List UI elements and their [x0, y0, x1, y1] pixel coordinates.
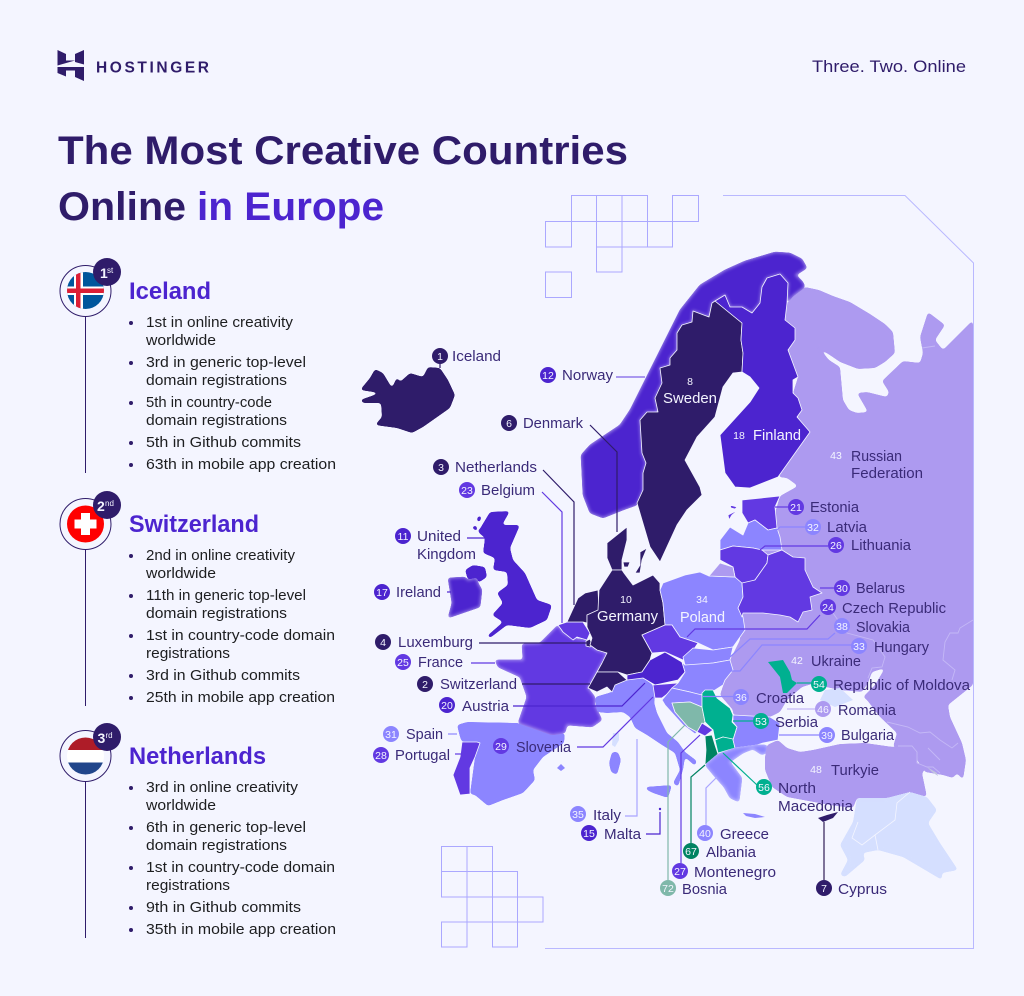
label: Spain: 31: [385, 729, 397, 741]
list: Iceland stats: domain registrations: [146, 413, 287, 429]
label: Germany: Germany: [597, 609, 659, 625]
country: Norway: [581, 252, 807, 518]
country: Bulgaria: [733, 715, 780, 748]
label: Sweden: Sweden: [663, 391, 717, 407]
label: Montenegro: 27: [674, 866, 686, 878]
label: Russian Federation: [830, 449, 923, 482]
label: Belarus: Belarus: [856, 581, 905, 597]
label: Slovenia: [493, 738, 572, 756]
country: Switzerland: [588, 672, 627, 692]
label: Sweden: [663, 376, 717, 407]
label: Estonia: 21: [790, 502, 802, 514]
decorative frame: [545, 196, 974, 948]
label: Russian Federation: 43: [830, 450, 842, 462]
label: Cyprus: Cyprus: [838, 882, 887, 898]
country: Bosnia: [672, 702, 705, 732]
label: Luxemburg: [375, 634, 473, 651]
label: Romania: Romania: [838, 703, 897, 719]
label: Malta: [581, 825, 642, 843]
label: Czech Republic: Czech Republic: [842, 601, 946, 617]
list: Switzerland stats: 25th in mobile app creation: [146, 690, 335, 706]
label: Turkyie: [810, 763, 879, 779]
label: Estonia: [788, 499, 860, 516]
map of Europe: [360, 252, 973, 880]
list: Iceland stats: 3rd in generic top-level: [146, 355, 306, 371]
label: Croatia: Croatia: [756, 691, 805, 707]
list: Netherlands stats: 1st in country-code domain: [146, 860, 335, 876]
label: Cyprus: 7: [821, 883, 827, 895]
label: North Macedonia: North: [778, 781, 816, 797]
title: Online: [58, 185, 186, 229]
label: Italy: 35: [572, 809, 584, 821]
label: Albania: 67: [685, 846, 697, 858]
label: Latvia: 32: [807, 522, 819, 534]
label: United Kingdom: Kingdom: [417, 547, 476, 563]
label: France: 25: [397, 657, 409, 669]
label: Albania: Albania: [706, 845, 757, 861]
label: Greece: 40: [699, 828, 711, 840]
label: United Kingdom: United: [417, 529, 461, 545]
label: Norway: 12: [542, 370, 554, 382]
icon: Switzerland flag: [60, 491, 121, 550]
label: Greece: Greece: [720, 827, 769, 843]
label: Germany: [597, 594, 659, 625]
label: Croatia: [733, 689, 805, 707]
label: Latvia: [805, 519, 868, 536]
label: Norway: Norway: [562, 368, 614, 384]
label: Estonia: Estonia: [810, 500, 860, 516]
country: Albania: [705, 735, 718, 765]
label: Denmark: Denmark: [523, 416, 584, 432]
country borders: Ukraine, Russia and Caucasus: [833, 346, 973, 773]
label: Poland: 34: [696, 594, 708, 606]
island: Balearic Islands: [557, 764, 565, 771]
label: Ireland: 17: [376, 587, 388, 599]
label: Croatia: 36: [735, 692, 747, 704]
list: Netherlands stats: 3rd in online creativity: [146, 780, 299, 796]
label: Luxemburg: 4: [380, 637, 386, 649]
label: Malta: 15: [583, 828, 595, 840]
list: Iceland stats: worldwide: [145, 333, 216, 349]
country: Belarus: [738, 550, 822, 622]
panel: Netherlands ranking: [60, 723, 336, 938]
label: Bulgaria: [819, 727, 895, 744]
label: Netherlands: 3: [438, 462, 444, 474]
label: Switzerland: Switzerland: [440, 677, 517, 693]
list: Switzerland stats: domain registrations: [146, 606, 287, 622]
country: Moldova: [768, 660, 797, 693]
heading: Netherlands: Netherlands: [129, 743, 266, 770]
title: [58, 129, 628, 229]
label: Lithuania: [828, 537, 912, 554]
label: Russian Federation: Federation: [851, 466, 923, 482]
decorative grid: bottom: [442, 846, 543, 947]
leader lines: [440, 362, 852, 880]
label: Ireland: [374, 584, 441, 601]
label: Austria: Austria: [462, 699, 510, 715]
country: Greece: [705, 745, 768, 802]
title: in Europe: [197, 185, 384, 229]
label: Italy: [570, 806, 622, 824]
list: Switzerland stats: registrations: [146, 646, 230, 662]
country: Estonia: [728, 496, 780, 530]
list: Switzerland stats: [129, 548, 335, 706]
list: Switzerland stats: worldwide: [145, 566, 216, 582]
label: North Macedonia: Macedonia: [778, 799, 854, 815]
island: Corsica: [612, 733, 619, 747]
label: Italy: Italy: [593, 808, 622, 824]
label: Bosnia: [660, 880, 728, 898]
icon: Netherlands flag: rd: [106, 731, 113, 740]
label: Switzerland: 2: [422, 679, 428, 691]
list: Iceland stats: 1st in online creativity: [146, 315, 294, 331]
label: Norway: [540, 367, 614, 384]
country: Belgium: [558, 622, 590, 640]
label: Lithuania: Lithuania: [851, 538, 912, 554]
label: Hungary: [851, 638, 930, 656]
island: Crete: [743, 813, 765, 818]
label: Latvia: Latvia: [827, 520, 868, 536]
panel: Iceland ranking: [60, 258, 336, 473]
label: Hungary: 33: [853, 641, 865, 653]
icon: Switzerland flag: nd: [105, 499, 114, 508]
country: Slovakia: [683, 647, 733, 665]
icon: Iceland flag: 1: [100, 265, 108, 281]
logo: Hostinger: [58, 50, 209, 81]
list: Iceland stats: [129, 315, 336, 473]
label: Slovakia: [834, 618, 911, 636]
list: Iceland stats: domain registrations: [146, 373, 287, 389]
country: Turkiye: [765, 740, 927, 808]
label: Montenegro: [672, 863, 776, 881]
label: Albania: [683, 843, 757, 861]
list: Netherlands stats: 35th in mobile app creation: [146, 922, 336, 938]
label: United Kingdom: 11: [398, 531, 409, 543]
country: Luxembourg: [586, 639, 592, 647]
label: Ireland: Ireland: [396, 585, 441, 601]
label: Republic of Moldova: 54: [813, 679, 825, 691]
heading: Switzerland: Switzerland: [129, 511, 259, 538]
label: Slovenia: Slovenia: [516, 740, 572, 756]
label: Germany: 10: [620, 594, 632, 606]
country: Spain: [457, 722, 565, 806]
label: Serbia: [753, 713, 819, 731]
region: Middle East: [840, 792, 958, 880]
icon: Netherlands flag: [60, 723, 121, 782]
region: Crimea: [820, 688, 853, 707]
list: Switzerland stats: 1st in country-code domain: [146, 628, 335, 644]
decorative grid: top: [546, 196, 698, 298]
country: Cyprus: [818, 812, 838, 822]
country: Iceland: [360, 367, 455, 433]
list: Netherlands stats: worldwide: [145, 798, 216, 814]
list: Iceland stats: 5th in country-code: [146, 395, 272, 411]
label: Poland: [680, 594, 725, 626]
logo: Hostinger: HOSTINGER: [96, 60, 209, 76]
title: The Most Creative Countries: [58, 129, 628, 173]
label: Montenegro: Montenegro: [694, 865, 776, 881]
country: Montenegro: [697, 723, 713, 736]
label: Spain: Spain: [406, 727, 443, 743]
list: Iceland stats: 63th in mobile app creation: [146, 457, 336, 473]
icon: Netherlands flag: 3: [98, 730, 106, 746]
label: Slovenia: 29: [495, 741, 507, 753]
label: Iceland: 1: [437, 351, 443, 363]
country: Finland: [715, 274, 810, 488]
label: Turkyie: 48: [810, 764, 822, 776]
label: Belarus: [834, 580, 905, 597]
label: France: France: [418, 655, 463, 671]
label: Serbia: Serbia: [775, 715, 819, 731]
country: France: [495, 625, 607, 735]
country: Poland: [660, 572, 745, 650]
label: Portugal: 28: [375, 750, 387, 762]
label: Turkyie: Turkyie: [831, 763, 879, 779]
label: Iceland: [432, 348, 501, 365]
country: North Macedonia: [715, 737, 735, 753]
label: Austria: 20: [441, 700, 453, 712]
icon: Iceland flag: [60, 258, 121, 316]
label: Bulgaria: 39: [821, 730, 833, 742]
tagline: Three. Two. Online: [812, 57, 966, 76]
country: Lithuania: [720, 546, 768, 584]
label: Romania: 46: [817, 704, 829, 716]
country: Hungary: [672, 660, 733, 695]
label: Belarus: 30: [836, 583, 848, 595]
country: Croatia: [662, 688, 702, 734]
label: Austria: [439, 697, 510, 715]
country: Portugal: [453, 742, 480, 795]
label: France: [395, 654, 463, 671]
list: Netherlands stats: 6th in generic top-level: [146, 820, 306, 836]
country: Ireland: [448, 577, 482, 618]
list: Netherlands stats: [129, 780, 336, 938]
heading: Iceland: Iceland: [129, 278, 211, 305]
label: Greece: [697, 825, 769, 843]
label: Luxemburg: Luxemburg: [398, 635, 473, 651]
icon: Switzerland flag: 2: [97, 498, 105, 514]
country: Denmark: [607, 527, 647, 573]
label: Ukraine: 42: [791, 655, 803, 667]
list: Netherlands stats: domain registrations: [146, 838, 287, 854]
country: Austria: [627, 652, 685, 685]
country: Latvia: [720, 520, 782, 550]
label: Portugal: [373, 747, 450, 764]
country: Armenia region: [927, 767, 938, 776]
label: North Macedonia: 56: [758, 782, 770, 794]
panel: Switzerland ranking: [60, 491, 335, 706]
label: Belgium: Belgium: [481, 483, 535, 499]
country: Czech Republic: [642, 625, 698, 660]
label: Netherlands: Netherlands: [455, 460, 537, 476]
label: Malta: Malta: [604, 827, 642, 843]
label: North Macedonia: [756, 779, 854, 815]
label: Russian Federation: Russian: [851, 449, 902, 465]
list: Switzerland stats: 3rd in Github commits: [146, 668, 300, 684]
label: Belgium: [459, 482, 535, 499]
country: Netherlands: [567, 590, 599, 623]
label: Sweden: 8: [687, 376, 693, 388]
label: Iceland: Iceland: [452, 349, 501, 365]
label: Slovakia: Slovakia: [856, 620, 911, 636]
label: Finland: Finland: [753, 428, 801, 444]
label: Belgium: 23: [461, 485, 473, 497]
label: Bosnia: 72: [662, 883, 674, 895]
country: Russian Federation and neighbours base: [720, 287, 973, 780]
icon: Iceland flag: st: [107, 266, 114, 275]
region: Kaliningrad: [709, 563, 735, 577]
country: Sweden: [637, 301, 743, 562]
label: Bosnia: Bosnia: [682, 882, 728, 898]
list: Switzerland stats: 2nd in online creativity: [146, 548, 296, 564]
list: Netherlands stats: 9th in Github commits: [146, 900, 301, 916]
label: Poland: Poland: [680, 610, 725, 626]
country: Italy: [595, 678, 697, 798]
label: Slovakia: 38: [836, 621, 848, 633]
dot: Malta: [659, 808, 661, 810]
label: Republic of Moldova: Republic of Moldova: [833, 678, 971, 694]
label: United Kingdom: [395, 528, 476, 563]
label: Portugal: Portugal: [395, 748, 450, 764]
label: Denmark: [501, 415, 584, 432]
label: Bulgaria: Bulgaria: [841, 728, 895, 744]
label: Czech Republic: 24: [822, 602, 834, 614]
label: Cyprus: [816, 880, 887, 898]
country: Serbia: [702, 690, 737, 740]
label: Serbia: 53: [755, 716, 767, 728]
list: Switzerland stats: 11th in generic top-level: [146, 588, 306, 604]
label: Romania: [815, 701, 897, 719]
country: United Kingdom: [465, 511, 552, 638]
label: Denmark: 6: [506, 418, 512, 430]
country: Slovenia: [653, 683, 678, 698]
list: Netherlands stats: registrations: [146, 878, 230, 894]
country: Germany: [587, 570, 665, 675]
label: Lithuania: 26: [830, 540, 842, 552]
label: Finland: 18: [733, 430, 745, 442]
label: Spain: [383, 726, 443, 743]
label: Ukraine: Ukraine: [811, 654, 861, 670]
list: Iceland stats: 5th in Github commits: [146, 435, 301, 451]
label: Hungary: Hungary: [874, 640, 930, 656]
